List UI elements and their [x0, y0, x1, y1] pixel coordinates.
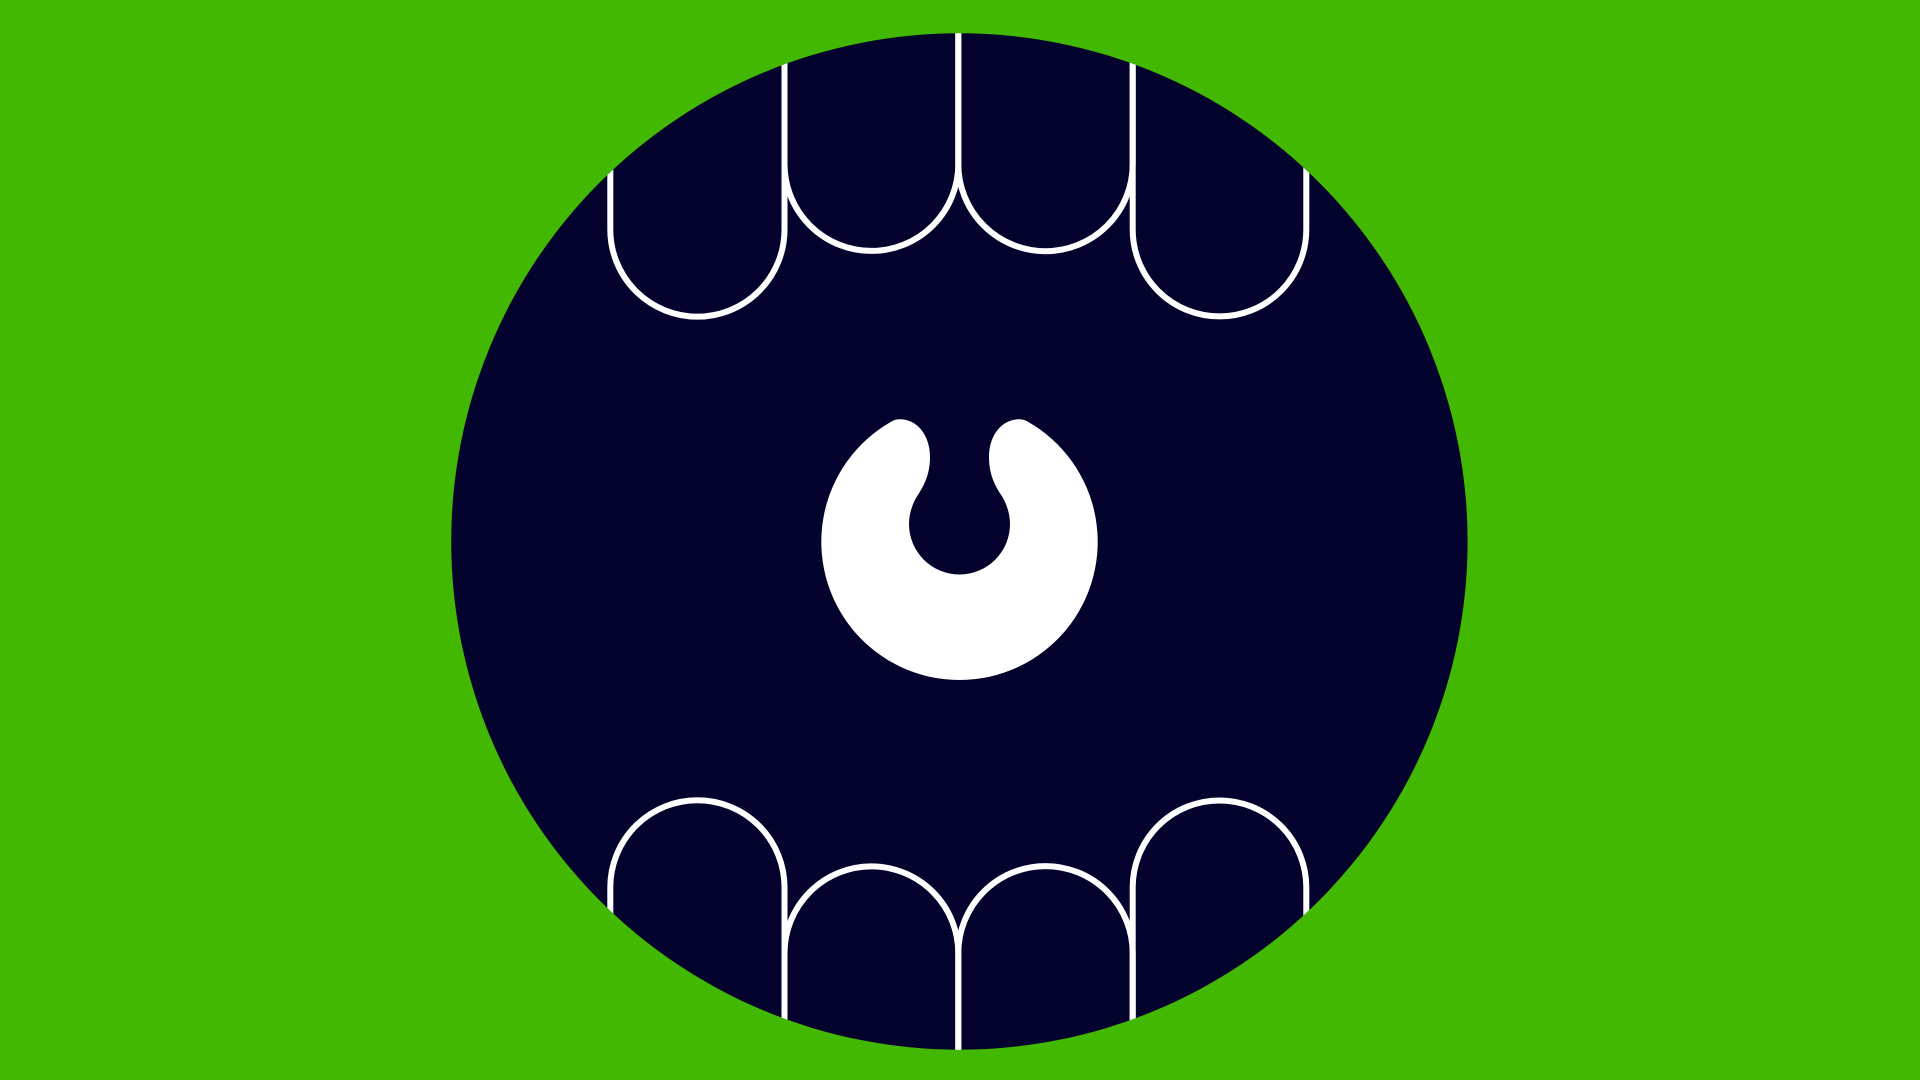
lower tooth 1	[607, 797, 788, 1020]
upper tooth 2	[784, 0, 958, 251]
icon: white tongue ring	[821, 419, 1098, 680]
lower tooth 2	[784, 866, 958, 1080]
upper tooth 4	[1130, 62, 1310, 320]
illustration: open mouth on green background	[451, 33, 1468, 1050]
mouth circle	[451, 33, 1468, 1050]
teeth group	[610, 0, 1306, 1080]
upper teeth	[610, 0, 1306, 317]
lower tooth 4	[1130, 798, 1310, 1020]
lower tooth 3	[958, 866, 1133, 1080]
upper tooth 1	[607, 63, 788, 320]
lower teeth	[610, 800, 1306, 1080]
upper tooth 3	[958, 0, 1133, 251]
